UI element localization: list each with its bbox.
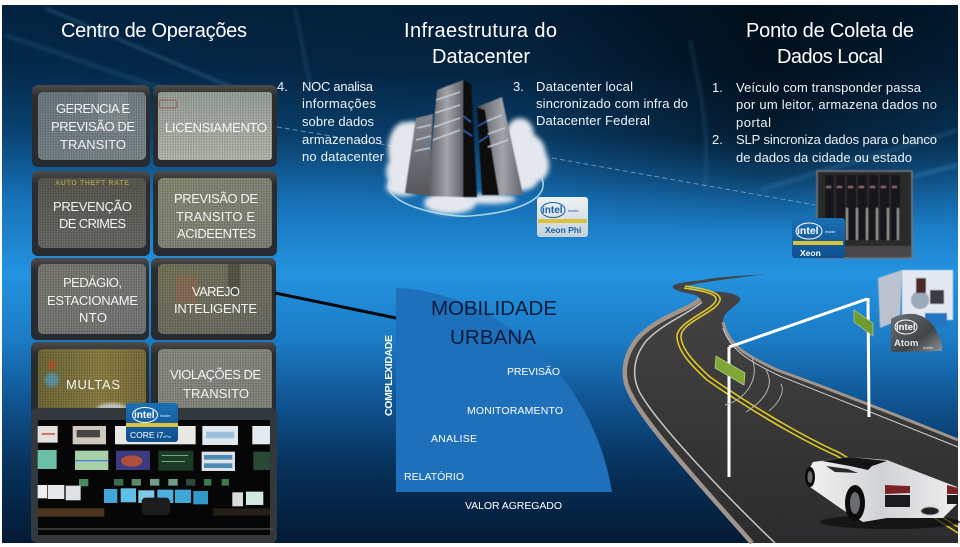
- icon: Intel Xeon Phi badge: [537, 197, 588, 237]
- title: Infraestrutura do Datacenter: Datacenter: [432, 46, 530, 68]
- tile: PEDÁGIO, ESTACIONAMENTO: NTO: [79, 310, 107, 325]
- tile: PREVISÃO DE TRANSITO E ACIDEENTES: [153, 171, 277, 256]
- tile: VAREJO INTELIGENTE: VAREJO: [192, 284, 240, 299]
- icon: Intel Xeon Phi badge: intel: [542, 205, 563, 216]
- yellow centre line: [677, 286, 958, 533]
- title: Ponto de Coleta de Dados Local: [746, 20, 914, 68]
- icon: Intel Core i7 vPro badge: [126, 403, 178, 442]
- reader sign left: [715, 356, 745, 385]
- tile: VIOLAÇÕES DE TRANSITO: [151, 342, 276, 424]
- tile: PEDÁGIO, ESTACIONAMENTO: ESTACIONAME: [47, 293, 138, 308]
- title: Infraestrutura do Datacenter: [404, 20, 557, 68]
- axis label: COMPLEXIDADE: COMPLEXIDADE: [383, 335, 395, 416]
- text: step 4 NOC: 4.: [277, 79, 288, 94]
- tile: MULTAS: [31, 342, 149, 424]
- icon: Intel Xeon badge: Xeon: [800, 248, 821, 258]
- text: step 3 datacenter: Datacenter Federal: [536, 113, 650, 128]
- level labels: [404, 365, 563, 483]
- tile: PREVENÇÃO DE CRIMES: [32, 171, 150, 256]
- text: steps 1 and 2: de dados da cidade ou estado: [736, 150, 912, 165]
- tile: GERENCIA E PREVISÃO DE TRANSITO: PREVISÃO DE: [51, 119, 135, 134]
- icon: Intel Xeon Phi badge: Xeon Phi: [545, 225, 581, 235]
- reader sign right: [854, 310, 873, 336]
- text: steps 1 and 2: 1.: [712, 80, 723, 95]
- chart title: [431, 297, 557, 349]
- icon: datacenter cloud with server towers: [386, 80, 549, 216]
- level labels: PREVISÃO: [507, 365, 560, 378]
- tile: VIOLAÇÕES DE TRANSITO: VIOLAÇÕES DE: [170, 367, 261, 382]
- title: Ponto de Coleta de Dados Local: Dados Local: [777, 46, 883, 68]
- panel: control room photo: [31, 408, 277, 543]
- icon: Intel Core i7 vPro badge: intel: [134, 410, 155, 421]
- icon: Intel Core i7 vPro badge: vPro: [163, 434, 172, 439]
- text: step 3 datacenter: Datacenter local: [536, 79, 633, 94]
- icon: Intel Xeon badge: intel: [797, 225, 819, 237]
- road edge left: [625, 299, 752, 543]
- tile: VAREJO INTELIGENTE: INTELIGENTE: [174, 301, 257, 316]
- illustration: winding road: [625, 274, 958, 543]
- text: step 4 NOC: NOC analisa: [302, 79, 374, 94]
- tile: MULTAS: MULTAS: [66, 377, 120, 392]
- icon: Intel Core i7 vPro badge: inside: [160, 413, 171, 418]
- illustration: toll gantry: [715, 298, 873, 477]
- text: step 4 NOC: no datacenter: [302, 149, 385, 164]
- tile: PREVENÇÃO DE CRIMES: PREVENÇÃO: [53, 199, 132, 214]
- icon: blade server: [817, 171, 912, 258]
- tile: GERENCIA E PREVISÃO DE TRANSITO: [32, 85, 150, 167]
- tile: PREVENÇÃO DE CRIMES: AUTO THEFT RATE: [55, 180, 129, 187]
- tile: VAREJO INTELIGENTE: [151, 258, 276, 340]
- dashed link lines: [277, 127, 815, 205]
- chart title: URBANA: [450, 326, 536, 349]
- axis label: VALOR AGREGADO: VALOR AGREGADO: [465, 500, 562, 512]
- icon: Intel Atom badge: [891, 314, 942, 352]
- tile: PREVISÃO DE TRANSITO E ACIDEENTES: TRANSITO E: [176, 209, 255, 224]
- text: steps 1 and 2: [712, 80, 937, 165]
- tile: LICENSIAMENTO: [153, 85, 277, 167]
- tile: PREVISÃO DE TRANSITO E ACIDEENTES: ACIDEENTES: [177, 226, 256, 241]
- reader signal arcs: [725, 358, 782, 412]
- text: step 4 NOC: [277, 79, 385, 164]
- tile: PEDÁGIO, ESTACIONAMENTO: [31, 258, 149, 340]
- orbit ring: [389, 176, 543, 216]
- text: steps 1 and 2: por um leitor, armazena dados no: [736, 97, 937, 112]
- text: steps 1 and 2: 2.: [712, 132, 723, 147]
- text: step 4 NOC: sobre dados: [302, 114, 374, 129]
- text: step 4 NOC: informações: [302, 96, 376, 111]
- text: step 3 datacenter: sincronizado com infra do: [536, 96, 688, 111]
- text: step 3 datacenter: [513, 79, 688, 128]
- text: steps 1 and 2: Veículo com transponder passa: [736, 80, 922, 95]
- tile: PREVENÇÃO DE CRIMES: DE CRIMES: [59, 216, 126, 231]
- road edge right: [723, 322, 958, 440]
- tile: VIOLAÇÕES DE TRANSITO: TRANSITO: [183, 386, 249, 401]
- illustration: silver sports car: [805, 457, 960, 529]
- tile: GERENCIA E PREVISÃO DE TRANSITO: GERENCIA E: [56, 101, 130, 116]
- icon: Intel Xeon badge: inside: [825, 229, 836, 234]
- chart: urban mobility quarter curve: [383, 288, 612, 512]
- icon: roadside cabinet: [878, 270, 953, 328]
- level labels: ANALISE: [431, 433, 477, 445]
- level labels: MONITORAMENTO: [467, 405, 563, 417]
- towers: [405, 80, 523, 197]
- text: steps 1 and 2: SLP sincroniza dados para o banco: [736, 132, 937, 147]
- icon: Intel Core i7 vPro badge: CORE i7: [130, 430, 164, 440]
- chart title: MOBILIDADE: [431, 297, 557, 320]
- icon: Intel Atom badge: Atom: [894, 338, 918, 349]
- icon: Intel Atom badge: inside: [923, 345, 934, 350]
- icon: Intel Xeon Phi badge: inside: [568, 208, 579, 213]
- text: step 3 datacenter: 3.: [513, 79, 524, 94]
- icon: Intel Xeon badge: [792, 218, 845, 258]
- tile: PREVISÃO DE TRANSITO E ACIDEENTES: PREVISÃO DE: [174, 191, 258, 206]
- panel: operations wall tiles: [31, 85, 277, 424]
- cloud: [386, 118, 549, 214]
- tile: PEDÁGIO, ESTACIONAMENTO: PEDÁGIO,: [63, 275, 122, 290]
- title: Infraestrutura do Datacenter: Infraestrutura do: [404, 20, 557, 42]
- title: Centro de Operações: Centro de Operações: [61, 20, 247, 42]
- title: Ponto de Coleta de Dados Local: Ponto de Coleta de: [746, 20, 914, 42]
- text: steps 1 and 2: portal: [736, 115, 771, 130]
- text: step 4 NOC: armazenados: [302, 132, 382, 147]
- tile: GERENCIA E PREVISÃO DE TRANSITO: TRANSITO: [60, 137, 126, 152]
- icon: Intel Atom badge: intel: [896, 322, 916, 333]
- tile: LICENSIAMENTO: LICENSIAMENTO: [165, 120, 267, 135]
- connector line to chart: [275, 293, 396, 318]
- level labels: RELATÓRIO: [404, 470, 464, 483]
